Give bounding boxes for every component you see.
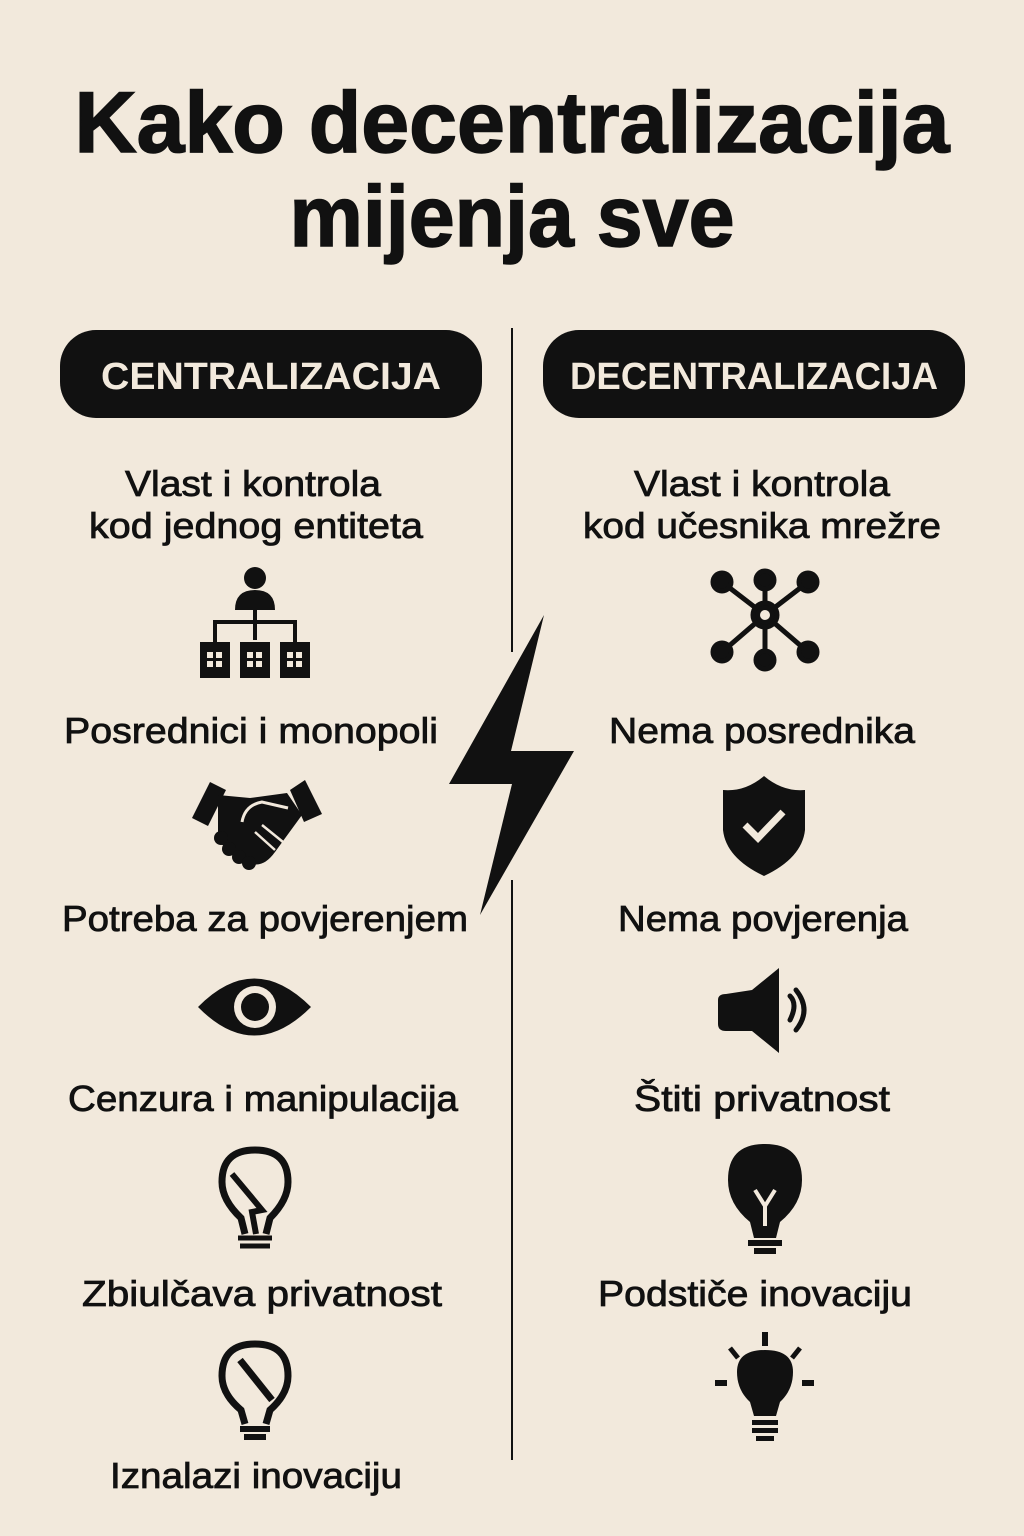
right column texts: Nema posrednika <box>609 710 916 751</box>
icon: bulb broken 1 <box>222 1150 288 1246</box>
title: mijenja sve <box>290 169 734 265</box>
right column texts: Vlast i kontrola <box>634 463 891 504</box>
lightning bolt <box>449 615 574 915</box>
right column texts <box>583 463 941 1314</box>
icon: bulb broken 2 <box>222 1344 288 1440</box>
left column texts: Cenzura i manipulacija <box>68 1078 459 1119</box>
icon: shield <box>723 776 805 876</box>
left column texts: Posrednici i monopoli <box>64 710 438 751</box>
left column texts: Zbiulčava privatnost <box>82 1273 442 1314</box>
left column texts: kod jednog entiteta <box>89 505 424 546</box>
icon: eye <box>198 978 311 1036</box>
left column texts: Iznalazi inovaciju <box>110 1455 402 1496</box>
icon: hierarchy <box>200 567 310 678</box>
icon: speaker <box>718 968 804 1053</box>
icon: network <box>713 571 817 669</box>
icon: bulb filled <box>728 1144 802 1254</box>
icon: bulb with rays <box>715 1332 814 1441</box>
pill: decentralizacija <box>543 330 965 418</box>
right column texts: Podstiče inovaciju <box>598 1273 912 1314</box>
left column texts: Potreba za povjerenjem <box>62 898 468 939</box>
pill: decentralizacija: DECENTRALIZACIJA <box>570 356 938 398</box>
title <box>74 75 951 265</box>
right column texts: kod učesnika mrežre <box>583 505 941 546</box>
pill: centralizacija <box>60 330 482 418</box>
left column texts <box>62 463 468 1496</box>
right column texts: Nema povjerenja <box>618 898 909 939</box>
left column texts: Vlast i kontrola <box>125 463 382 504</box>
right column texts: Štiti privatnost <box>634 1078 890 1119</box>
title: Kako decentralizacija <box>74 75 951 171</box>
pill: centralizacija: CENTRALIZACIJA <box>101 356 441 398</box>
icon: handshake <box>192 780 322 870</box>
